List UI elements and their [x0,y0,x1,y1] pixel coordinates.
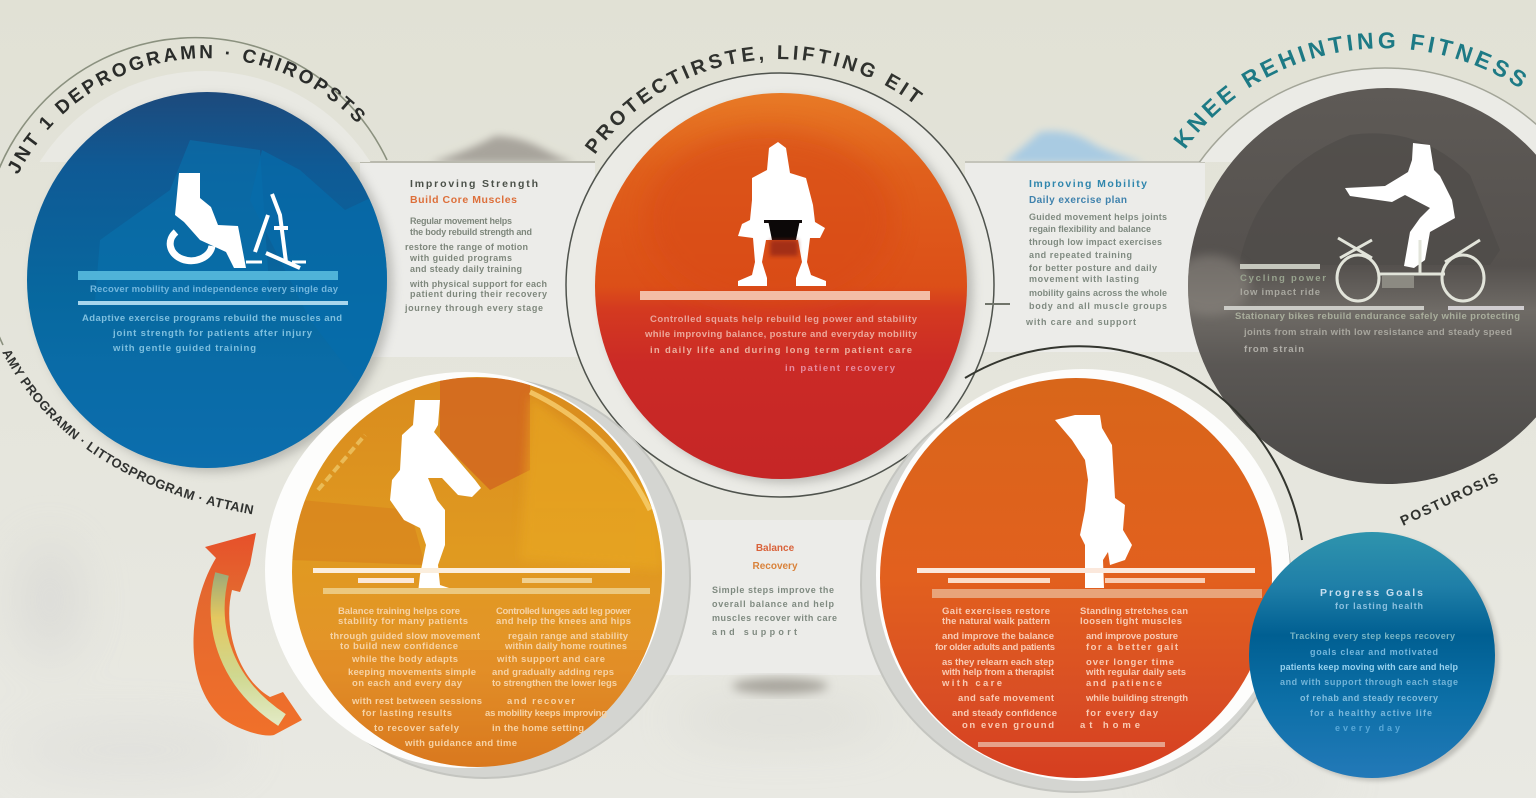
text block: blue circle: Adaptive exercise programs rebuild the muscles and [82,313,342,324]
panel: lower center text strip: Recovery [752,561,798,572]
text block: orange circle: for older adults and patients [935,642,1055,653]
circle: grey cycling [1170,88,1536,484]
text block: yellow circle: keeping movements simple [348,667,476,678]
panel heading: upper left: Improving Strength [410,178,538,190]
text block: blue circle [78,271,348,354]
text block: yellow circle: within daily home routines [504,641,627,652]
curved title: blue circle: JNT 1 DEPROGRAMN · CHIROPSTS [8,45,365,174]
text block: lower center: Simple steps improve the [712,585,834,595]
text block: upper right: and repeated training [1029,250,1132,260]
text block: upper right: mobility gains across the whole [1029,288,1167,298]
text block: orange circle: and improve the balance [942,631,1054,642]
text block: grey circle: low impact ride [1240,287,1320,298]
text block: orange circle: as they relearn each step [942,657,1054,668]
text block: upper right: Guided movement helps joints [1029,212,1167,222]
circle: yellow lunge [265,372,690,778]
text block: red circle [640,291,930,374]
icon: squatting figure [738,142,826,286]
text block: grey circle: joints from strain with low resistance and steady speed [1243,327,1512,338]
text block: blue circle: Recover mobility and independence every single day [90,284,339,295]
text block: upper right: movement with lasting [1029,274,1139,284]
text block: orange circle: loosen tight muscles [1080,616,1182,627]
text block: yellow circle: and gradually adding reps [492,667,614,678]
text block: orange circle: with regular daily sets [1085,667,1186,678]
text block: orange circle: for every day [1086,708,1159,719]
text block: orange circle: at home [1080,720,1140,731]
text block: blue circle: with gentle guided training [112,343,256,354]
panel heading: upper right: Improving Mobility [1029,178,1147,190]
text block: upper left: with guided programs [409,253,512,263]
text block: yellow circle: Controlled lunges add leg power [496,606,631,617]
text block: yellow circle: in the home setting [492,723,584,734]
text block: red circle: in daily life and during long term patient care [650,345,912,356]
text block: yellow circle: for lasting results [362,708,452,719]
text block: upper right: through low impact exercises [1029,237,1162,247]
text block: grey circle: Cycling power [1240,273,1326,284]
text block: upper left: the body rebuild strength and [410,227,532,237]
text block: yellow circle: and recover [507,696,575,707]
text block: orange circle: and safe movement [958,693,1055,704]
text block: upper right: body and all muscle groups [1029,301,1167,311]
text block: upper right [1025,212,1167,327]
text block: orange circle: while building strength [1085,693,1188,704]
ring: red circle [566,73,994,497]
circle: orange standing figure [861,369,1291,792]
text block: small blue circle: goals clear and motivated [1310,647,1438,657]
text block: yellow circle: Balance training helps core [338,606,460,617]
text block: orange circle: and patience [1086,678,1162,689]
text block: orange circle: on even ground [962,720,1054,731]
text block: orange circle: Standing stretches can [1080,606,1188,617]
ring: blue circle [0,36,388,346]
text block: orange circle: over longer time [1086,657,1174,668]
text block: lower center: overall balance and help [712,599,834,609]
curved title: red circle: PROTECTIRSTE, LIFTING EIT [584,45,924,154]
text block: upper left [404,216,547,313]
text block: orange circle [917,568,1262,747]
connector: red ring tick [985,303,1010,305]
panel: lower center text strip [650,520,900,694]
text block: small blue circle: for a healthy active life [1310,708,1432,718]
icon: standing stretch figure [1055,415,1132,588]
panel: upper right text strip: Daily exercise plan [1029,195,1127,206]
text block: upper right: with care and support [1025,317,1136,327]
text block: upper left: with physical support for each [409,279,547,289]
icon: wheelchair and walker [170,173,306,268]
text block: upper left: and steady daily training [410,264,522,274]
text block: small blue circle: every day [1335,723,1400,733]
text block: yellow circle: with guidance and time [404,738,517,749]
text block: orange circle: and steady confidence [952,708,1057,719]
text block: yellow circle: with support and care [496,654,605,665]
text block: yellow circle: to recover safely [374,723,460,734]
text block: upper right: regain flexibility and balance [1029,224,1151,234]
text block: lower center: muscles recover with care [712,613,837,623]
text block: orange circle: the natural walk pattern [942,616,1050,627]
panel: upper left text strip [360,136,595,357]
text block: small blue circle: Progress Goals [1320,587,1423,599]
text block: yellow circle: as mobility keeps improving [485,708,607,719]
text block: upper left: journey through every stage [404,303,543,313]
text block: small blue circle: for lasting health [1335,601,1423,611]
text block: yellow circle: with rest between sessions [351,696,482,707]
text block: orange circle: Gait exercises restore [942,606,1050,617]
text block: upper left: patient during their recovery [410,289,547,299]
text block: lower center [712,585,837,637]
text block: lower center: and support [712,627,797,637]
text block: yellow circle: to strengthen the lower legs [492,678,617,689]
arrow: curved orange [193,533,302,736]
text block: yellow circle: and help the knees and hips [496,616,631,627]
text block: upper left: restore the range of motion [405,242,528,252]
text block: orange circle: for a better gait [1086,642,1179,653]
text block: orange circle: and improve posture [1086,631,1178,642]
circle: blue wheelchair [27,92,393,472]
text block: upper right: for better posture and daily [1029,263,1157,273]
text block: small blue circle: Tracking every step keeps recovery [1290,631,1455,641]
text block: orange circle: with care [941,678,1002,689]
panel heading: lower center: Balance [756,543,795,554]
text block: yellow circle: to build new confidence [340,641,458,652]
circle: red squat [595,93,973,483]
text block: small blue circle: patients keep moving with care and help [1280,662,1458,672]
icon: lunging figure [390,400,481,593]
text block: yellow circle: regain range and stability [508,631,629,642]
text block: small blue circle: and with support through each stage [1280,677,1458,687]
text block: small blue circle: of rehab and steady recovery [1300,693,1438,703]
text block: grey circle: Stationary bikes rebuild endurance safely while protecting [1235,311,1520,322]
curved caption: lower left: AMY PROGRAMN · LITTOSPROGRAM · ATTAIN [2,351,254,514]
icon: cyclist [1337,143,1484,301]
text block: red circle: in patient recovery [785,363,896,374]
text block: blue circle: joint strength for patients after injury [112,328,313,339]
text block: red circle: Controlled squats help rebuild leg power and stability [650,314,918,325]
text block: small blue circle [1280,587,1458,733]
caption: lower right: POSTUROSIS [1398,469,1502,529]
ring: orange circle outer arc [965,346,1302,540]
text block: grey circle: from strain [1244,344,1304,355]
text block: yellow circle: on each and every day [352,678,463,689]
text block: red circle: while improving balance, posture and everyday mobility [644,329,918,340]
text block: orange circle: with help from a therapist [941,667,1055,678]
panel: upper left text strip: Build Core Muscles [410,194,517,206]
curved title: grey circle: KNEE REHINTING FITNESS [1173,32,1526,149]
text block: yellow circle: through guided slow movement [330,631,481,642]
text block: yellow circle: stability for many patients [338,616,468,627]
text block: upper left: Regular movement helps [410,216,512,226]
circle: small blue [1249,532,1499,781]
text block: yellow circle [313,568,650,749]
text block: grey circle [1224,264,1524,355]
ring: grey circle [1198,67,1536,162]
text block: yellow circle: while the body adapts [351,654,458,665]
panel: upper right text strip [965,131,1205,352]
